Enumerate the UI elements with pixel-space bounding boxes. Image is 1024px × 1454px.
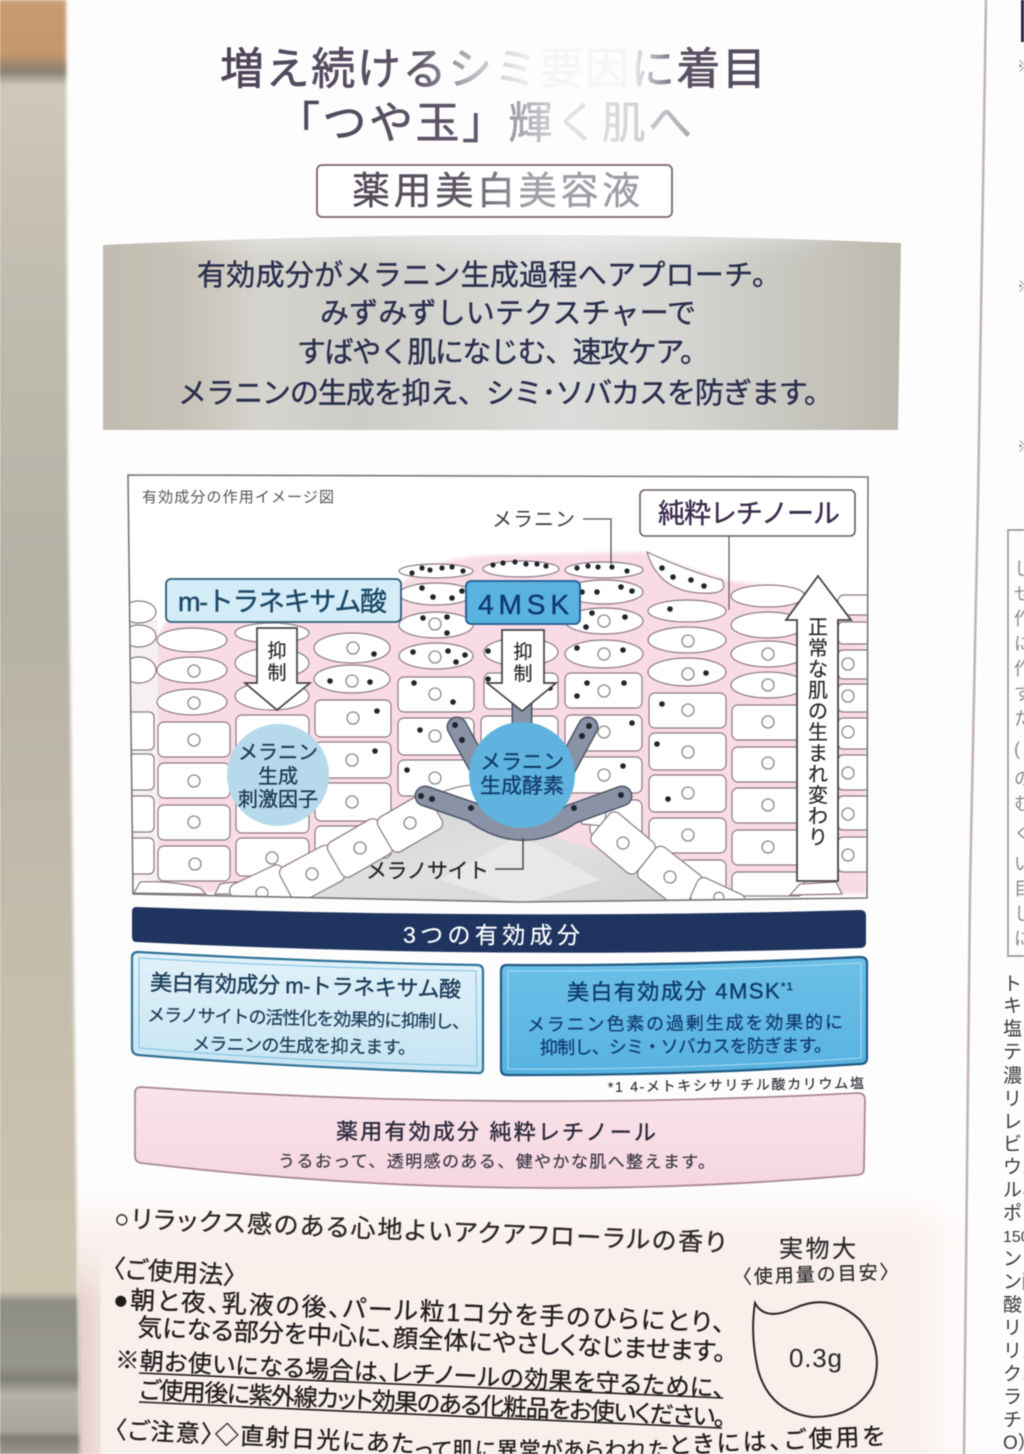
nuclei [188,615,854,870]
panel: pure retinol [135,1087,865,1188]
arrow: normal skin turnover: 変 [808,784,828,807]
text: directions heading: 〈ご使用法〉 [112,1255,237,1291]
panel: m-tranexamic acid: メラノサイトの活性化を効果的に抑制し、 [147,1005,470,1032]
neighbouring page text [1003,0,1024,1454]
title: 増え続けるシミ要因に着目 [220,45,766,94]
text: actual size: 〈使用量の目安〉 [732,1261,899,1289]
label: 4MSK: 4MSK [478,589,569,620]
text: fragrance: ○リラックス感のある心地よいアクアフローラルの香り [114,1205,726,1258]
skin tissue [122,552,878,905]
arrow: normal skin turnover [786,576,851,881]
panel: 4MSK: メラニン色素の過剰生成を効果的に [527,1012,843,1035]
arrow: normal skin turnover: 正 [808,617,828,639]
title [220,45,766,148]
label: pure retinol [640,490,855,610]
text: cautions [114,1417,885,1454]
panel: 4MSK: 美白有効成分 4MSK [567,978,780,1005]
caption: diagram title: 有効成分の作用イメージ図 [142,489,334,506]
label: pure retinol: 純粋レチノール [658,499,840,529]
text: directions: ●朝と夜、乳液の後、パール粒1コ分を手のひらにとり、 [113,1286,725,1337]
label: m-tranexamic acid: m-トラネキサム酸 [178,587,387,617]
neighbouring page text: ン [1003,1249,1022,1270]
circle: melanin stimulating factor: 刺激因子 [238,788,318,811]
arrow: inhibit right [487,630,556,711]
arrow: inhibit left [245,628,310,710]
fold between pages [964,0,986,1454]
heading bar: three active ingredients [132,907,866,953]
silver intro band: すばやく肌になじむ、速攻ケア。 [297,336,709,369]
label: melanocyte: メラノサイト [366,860,489,883]
neighbouring page text: ビ [1003,1133,1022,1155]
diagram: action of active ingredients [122,475,878,923]
icon: actual size droplet: 0.3g [789,1343,842,1373]
silver intro band: 有効成分がメラニン生成過程へアプローチ。 [197,259,781,292]
text: directions [113,1286,726,1367]
circle: melanin producing enzyme: 生成酵素 [480,775,564,798]
silver intro band: メラニンの生成を抑え、シミ･ソバカスを防ぎます。 [178,377,833,410]
silver intro band [102,235,902,430]
product type label: 薬用美白美容液 [352,171,640,213]
arrow: normal skin turnover: の [808,701,828,723]
product type label [317,165,672,217]
panel: m-tranexamic acid: メラニンの生成を抑えます。 [192,1034,416,1058]
text: actual size [732,1236,899,1289]
neighbouring page text: 塩 [1003,1018,1022,1040]
circle: melanin stimulating factor [227,724,329,826]
text: morning note [115,1347,726,1432]
silver intro band: みずみずしいテクスチャーで [320,298,696,330]
arrow: normal skin turnover: れ [808,764,828,786]
circle: melanin producing enzyme: メラニン [480,751,564,774]
panel: m-tranexamic acid [132,952,483,1073]
panel: 4MSK: *1 [781,981,793,993]
blurred backdrop strip [0,0,80,1454]
melanin dots [327,559,709,802]
arrow: normal skin turnover: わ [808,806,828,828]
neighbouring page text: キ [1003,996,1022,1017]
icon: actual size droplet [753,1302,877,1417]
arrow: inhibit right: 抑 [513,641,533,663]
circle: melanin stimulating factor: 生成 [258,765,298,788]
title: 「つや玉」輝く肌へ [276,99,692,148]
circle: melanin stimulating factor: メラニン [238,742,318,764]
text: directions: 気になる部分を中心に、顔全体にやさしくなじませます。 [137,1314,726,1367]
arrow: inhibit left: 制 [267,662,287,684]
arrow: inhibit right: 制 [513,663,533,685]
heading bar: three active ingredients: 3つの有効成分 [403,922,580,948]
arrow: normal skin turnover: 肌 [808,680,828,702]
arrow: normal skin turnover: な [808,659,828,681]
circle: melanin producing enzyme [469,722,575,828]
text: actual size: 実物大 [779,1236,856,1263]
text: morning note: ご使用後に紫外線カット効果のある化粧品をお使いください。 [139,1377,726,1432]
diagram frame [128,475,868,902]
label: melanin [492,509,611,564]
neighbouring page text: ( [1014,739,1020,759]
panel: pure retinol: 薬用有効成分 純粋レチノール [336,1119,656,1145]
panel: 4MSK: 抑制し、シミ・ソバカスを防ぎます。 [540,1035,832,1058]
label: melanin: メラニン [492,509,575,531]
arrow: normal skin turnover: 常 [808,637,828,660]
basal cell layer [228,784,746,900]
footnote: *1 4-メトキシサリチル酸カリウム塩 [608,1075,864,1095]
arrow: normal skin turnover: り [808,827,828,849]
arrow: inhibit left: 抑 [267,640,287,662]
neighbouring page text: 酸 [1003,1294,1022,1316]
arrow: normal skin turnover: 生 [808,721,828,744]
melanocyte [418,695,624,869]
panel: m-tranexamic acid: 美白有効成分 m-トラネキサム酸 [150,970,461,1002]
paper tint on the lower page [30,1215,940,1454]
label: 4MSK [466,581,580,624]
panel: 4MSK [501,957,867,1075]
neighbouring page text: ト [1003,974,1022,995]
label: m-tranexamic acid [166,579,401,622]
panel: pure retinol: うるおって、透明感のある、健やかな肌へ整えます。 [278,1152,715,1172]
neighbouring page text: 濃 [1003,1065,1022,1087]
arrow: normal skin turnover: ま [808,743,828,765]
text: morning note: ※朝お使いになる場合は、レチノールの効果を守るために、 [115,1347,725,1403]
